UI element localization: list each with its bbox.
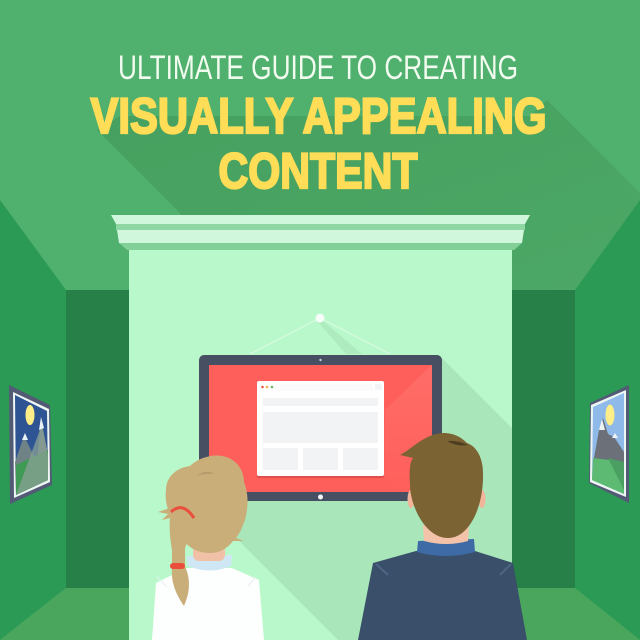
title line 2: VISUALLY APPEALING	[90, 88, 546, 144]
monitor shadow on wall	[199, 358, 512, 640]
wall pin	[316, 314, 324, 322]
collar	[417, 539, 475, 556]
hanging wire shadow	[318, 320, 362, 354]
title line 1: ULTIMATE GUIDE TO CREATING	[118, 49, 518, 87]
hair	[166, 455, 248, 553]
cornice	[111, 215, 530, 250]
collar	[187, 555, 232, 570]
jacket	[358, 551, 527, 640]
braid tie	[170, 563, 185, 569]
back wall	[66, 290, 575, 588]
jacket fold lines	[376, 564, 511, 575]
browser window shadow	[257, 383, 384, 478]
braid	[158, 508, 190, 606]
ceiling	[0, 0, 640, 292]
left picture	[9, 385, 52, 504]
floor	[0, 588, 640, 640]
monitor	[199, 355, 442, 501]
right wall	[575, 200, 640, 640]
right picture	[589, 385, 629, 503]
man	[358, 433, 527, 640]
wall pillar	[129, 249, 512, 640]
hair highlight	[447, 441, 468, 446]
title	[90, 49, 546, 199]
hair parting	[196, 472, 214, 476]
title long shadow	[97, 100, 640, 292]
woman	[152, 455, 264, 640]
neck	[423, 525, 469, 544]
screen	[209, 365, 432, 492]
shirt	[152, 568, 264, 640]
hair	[400, 433, 483, 538]
ears	[408, 490, 414, 508]
hanging wire	[250, 318, 390, 354]
neck	[193, 545, 225, 561]
title line 3: CONTENT	[218, 143, 418, 199]
browser window	[257, 381, 384, 476]
hair band	[171, 508, 194, 518]
left wall	[0, 200, 66, 640]
shirt fold lines	[157, 577, 256, 587]
